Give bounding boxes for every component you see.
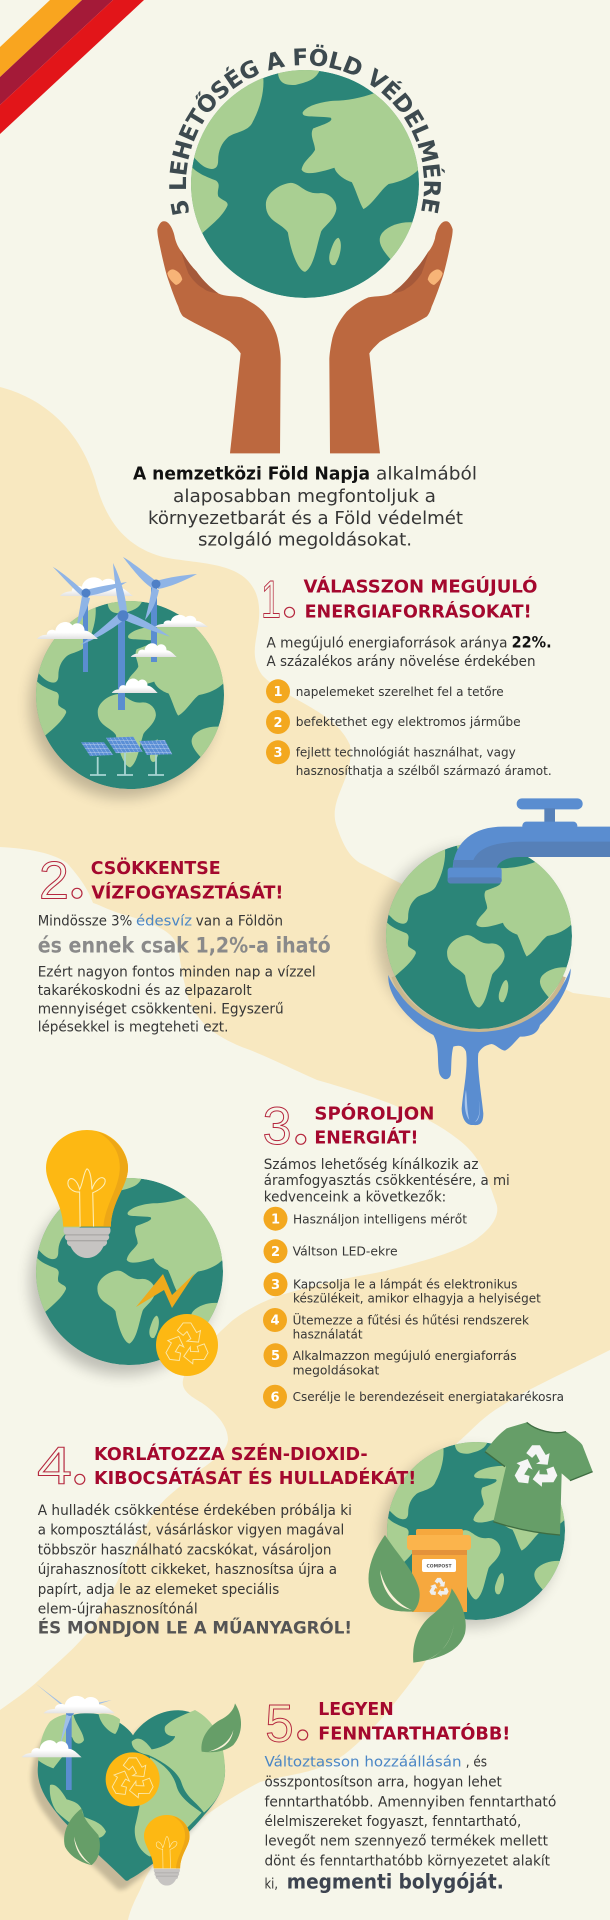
heading: SPÓROLJON (314, 1102, 434, 1124)
intro text (133, 464, 477, 550)
heading: ENERGIAFORRÁSOKAT! (305, 600, 532, 622)
intro text: A nemzetközi Föld Napja (133, 464, 370, 485)
tap (448, 798, 610, 883)
fact line: édesvíz (136, 913, 192, 929)
paragraph: A hulladék csökkentése érdekében próbálja ki (38, 1503, 352, 1519)
heading (314, 1102, 434, 1148)
list: hasznosíthatja a szélből származó áramot. (296, 764, 552, 779)
section 1: renewable energy text (261, 570, 552, 779)
paragraph (264, 1755, 556, 1893)
heading: LEGYEN (318, 1699, 394, 1720)
heading: CSÖKKENTSE (91, 857, 221, 879)
paragraph: áramfogyasztás csökkentésére, a mi (264, 1173, 510, 1189)
list: Ütemezze a fűtési és hűtési rendszerek (293, 1311, 530, 1328)
paragraph: A megújuló energiaforrások aránya (266, 635, 508, 651)
paragraph: a komposztálást, vásárláskor vigyen magával (38, 1523, 344, 1539)
paragraph: ki, (264, 1876, 278, 1892)
turbine (36, 1684, 112, 1790)
intro text: szolgáló megoldásokat. (198, 529, 412, 550)
list: Kapcsolja le a lámpát és elektronikus (293, 1277, 518, 1292)
lightning bolt (136, 1273, 195, 1308)
list: 1 (271, 1212, 280, 1227)
number 3 (263, 1097, 306, 1156)
paragraph (38, 1503, 352, 1618)
callout: ÉS MONDJON LE A MŰANYAGRÓL! (38, 1616, 352, 1638)
heart globe (38, 1710, 225, 1881)
clouds (37, 615, 208, 693)
heading (91, 857, 283, 903)
compost bin (407, 1529, 471, 1612)
paragraph: papírt, adja le az elemeket speciális (38, 1582, 279, 1598)
number 2 (39, 851, 82, 910)
main illustration: globe held in hands (157, 70, 453, 453)
paragraph: újrahasznosított cikkeket, hasznosítsa újra a (38, 1562, 337, 1578)
paragraph: 22%. (512, 632, 552, 651)
recycle badge (156, 1314, 218, 1376)
number 1: 1 (261, 570, 281, 629)
globe (383, 1442, 569, 1620)
list: 3 (273, 746, 283, 761)
intro text: alaposabban megfontoljuk a (173, 486, 436, 507)
wind turbines (53, 557, 197, 710)
paragraph: takarékoskodni és az elpazarolt (38, 983, 252, 999)
list: megoldásokat (293, 1364, 379, 1379)
heading (318, 1699, 510, 1744)
list: 3 (271, 1278, 280, 1293)
paragraph: levegőt nem szennyező termékek mellett (264, 1834, 548, 1850)
paragraph: fenntarthatóbb. Amennyiben fenntartható (264, 1794, 556, 1810)
background wave (0, 387, 610, 1920)
section 5 illustration: heart earth (22, 1684, 241, 1890)
paragraph: megmenti bolygóját. (287, 1869, 504, 1893)
highlighted fact: és ennek csak 1,2%-a iható (38, 934, 331, 958)
light bulb (46, 1130, 128, 1258)
paragraph (264, 1157, 510, 1206)
globe (31, 601, 229, 789)
list: befektethet egy elektromos járműbe (296, 715, 521, 730)
paragraph: elem-újrahasznosítónál (38, 1602, 198, 1618)
heading: KORLÁTOZZA SZÉN-DIOXID- (94, 1443, 368, 1465)
globe (381, 843, 577, 1029)
list: 2 (271, 1245, 280, 1260)
globe (31, 1178, 228, 1365)
section 1 illustration: globe with turbines and solar panels (30, 557, 229, 798)
paragraph: összpontosítson arra, hogyan lehet (264, 1775, 502, 1791)
heading: KIBOCSÁTÁSÁT ÉS HULLADÉKÁT! (94, 1467, 416, 1489)
paragraph: dönt és fenntarthatóbb környezetet alakít (264, 1854, 550, 1870)
paragraph (266, 632, 552, 670)
list: 6 (270, 1390, 280, 1405)
list: 2 (273, 716, 283, 731)
section 2: water text (38, 851, 331, 1036)
list (263, 1207, 564, 1409)
cloud behind turbines (60, 577, 133, 596)
paragraph: mennyiséget csökkenteni. Egyszerű (38, 1001, 284, 1017)
list: használatát (293, 1328, 363, 1343)
intro text: alkalmából (376, 464, 477, 485)
main globe (185, 70, 425, 298)
section 3: energy text (263, 1097, 564, 1409)
list: fejlett technológiát használhat, vagy (296, 746, 516, 761)
heading: VÁLASSZON MEGÚJULÓ (304, 576, 538, 598)
list: Használjon intelligens mérőt (293, 1212, 467, 1227)
number 3: 3 (263, 1097, 292, 1156)
list: 1 (273, 685, 283, 700)
t-shirt (485, 1422, 593, 1535)
paragraph: Számos lehetőség kínálkozik az (264, 1157, 478, 1173)
number 4 (37, 1437, 85, 1496)
paragraph: A százalékos arány növelése érdekében (266, 654, 536, 670)
list: Váltson LED-ekre (293, 1245, 398, 1260)
solar panels (81, 737, 172, 775)
paragraph: lépésekkel is megteheti ezt. (38, 1020, 228, 1036)
recycle badge (106, 1752, 160, 1806)
paragraph: többször használható zacskókat, vásároljon (38, 1542, 331, 1558)
list: Cserélje le berendezéseit energiatakarékosra (293, 1390, 564, 1405)
number 5 (265, 1695, 308, 1754)
heading: VÍZFOGYASZTÁSÁT! (91, 881, 283, 903)
clouds (22, 1696, 115, 1757)
fact line (38, 913, 283, 929)
number 2: 2 (39, 851, 69, 910)
paragraph (38, 965, 316, 1036)
list: készülékeit, amikor elhagyja a helyiséget (293, 1292, 541, 1307)
dripping water (388, 968, 571, 1125)
section 2 illustration: globe with tap and dripping water (377, 798, 610, 1125)
section 4 illustration: globe, t-shirt, compost bin, leaves (368, 1422, 593, 1663)
light bulb (144, 1815, 190, 1886)
section 5: sustainability text (264, 1695, 556, 1893)
heading: ENERGIÁT! (314, 1126, 418, 1148)
number 5: 5 (265, 1695, 294, 1754)
corner stripes (0, 0, 144, 134)
heading (304, 576, 538, 622)
fact line: van a Földön (196, 913, 283, 929)
section 3 illustration: globe, bulb, lightning, recycle (30, 1130, 228, 1376)
list: Alkalmazzon megújuló energiaforrás (293, 1349, 517, 1364)
list: napelemeket szerelhet fel a tetőre (296, 685, 504, 700)
right hand (329, 221, 453, 453)
intro text: környezetbarát és a Föld védelmét (148, 508, 463, 529)
compost bin: COMPOST (426, 1564, 452, 1570)
heading: FENNTARTHATÓBB! (318, 1722, 510, 1744)
list: 5 (271, 1349, 280, 1364)
paragraph: élelmiszereket fogyaszt, fenntartható, (264, 1814, 521, 1830)
section 4: waste text (37, 1437, 416, 1638)
paragraph: Változtasson hozzáállásán (264, 1755, 462, 1771)
list: 4 (270, 1314, 280, 1329)
leaves (368, 1535, 466, 1663)
heading (94, 1443, 416, 1489)
paragraph: , és (466, 1755, 487, 1771)
left hand (157, 221, 281, 453)
leaf lower left (64, 1808, 100, 1865)
number 4: 4 (37, 1437, 72, 1496)
title: curved: 5 LEHETŐSÉG A FÖLD VÉDELMÉRE (169, 44, 445, 215)
fact line: Mindössze 3% (38, 913, 132, 929)
paragraph: kedvenceink a következők: (264, 1190, 446, 1206)
list (266, 679, 552, 779)
paragraph: Ezért nagyon fontos minden nap a vízzel (38, 965, 316, 981)
leaf top right (201, 1703, 241, 1752)
